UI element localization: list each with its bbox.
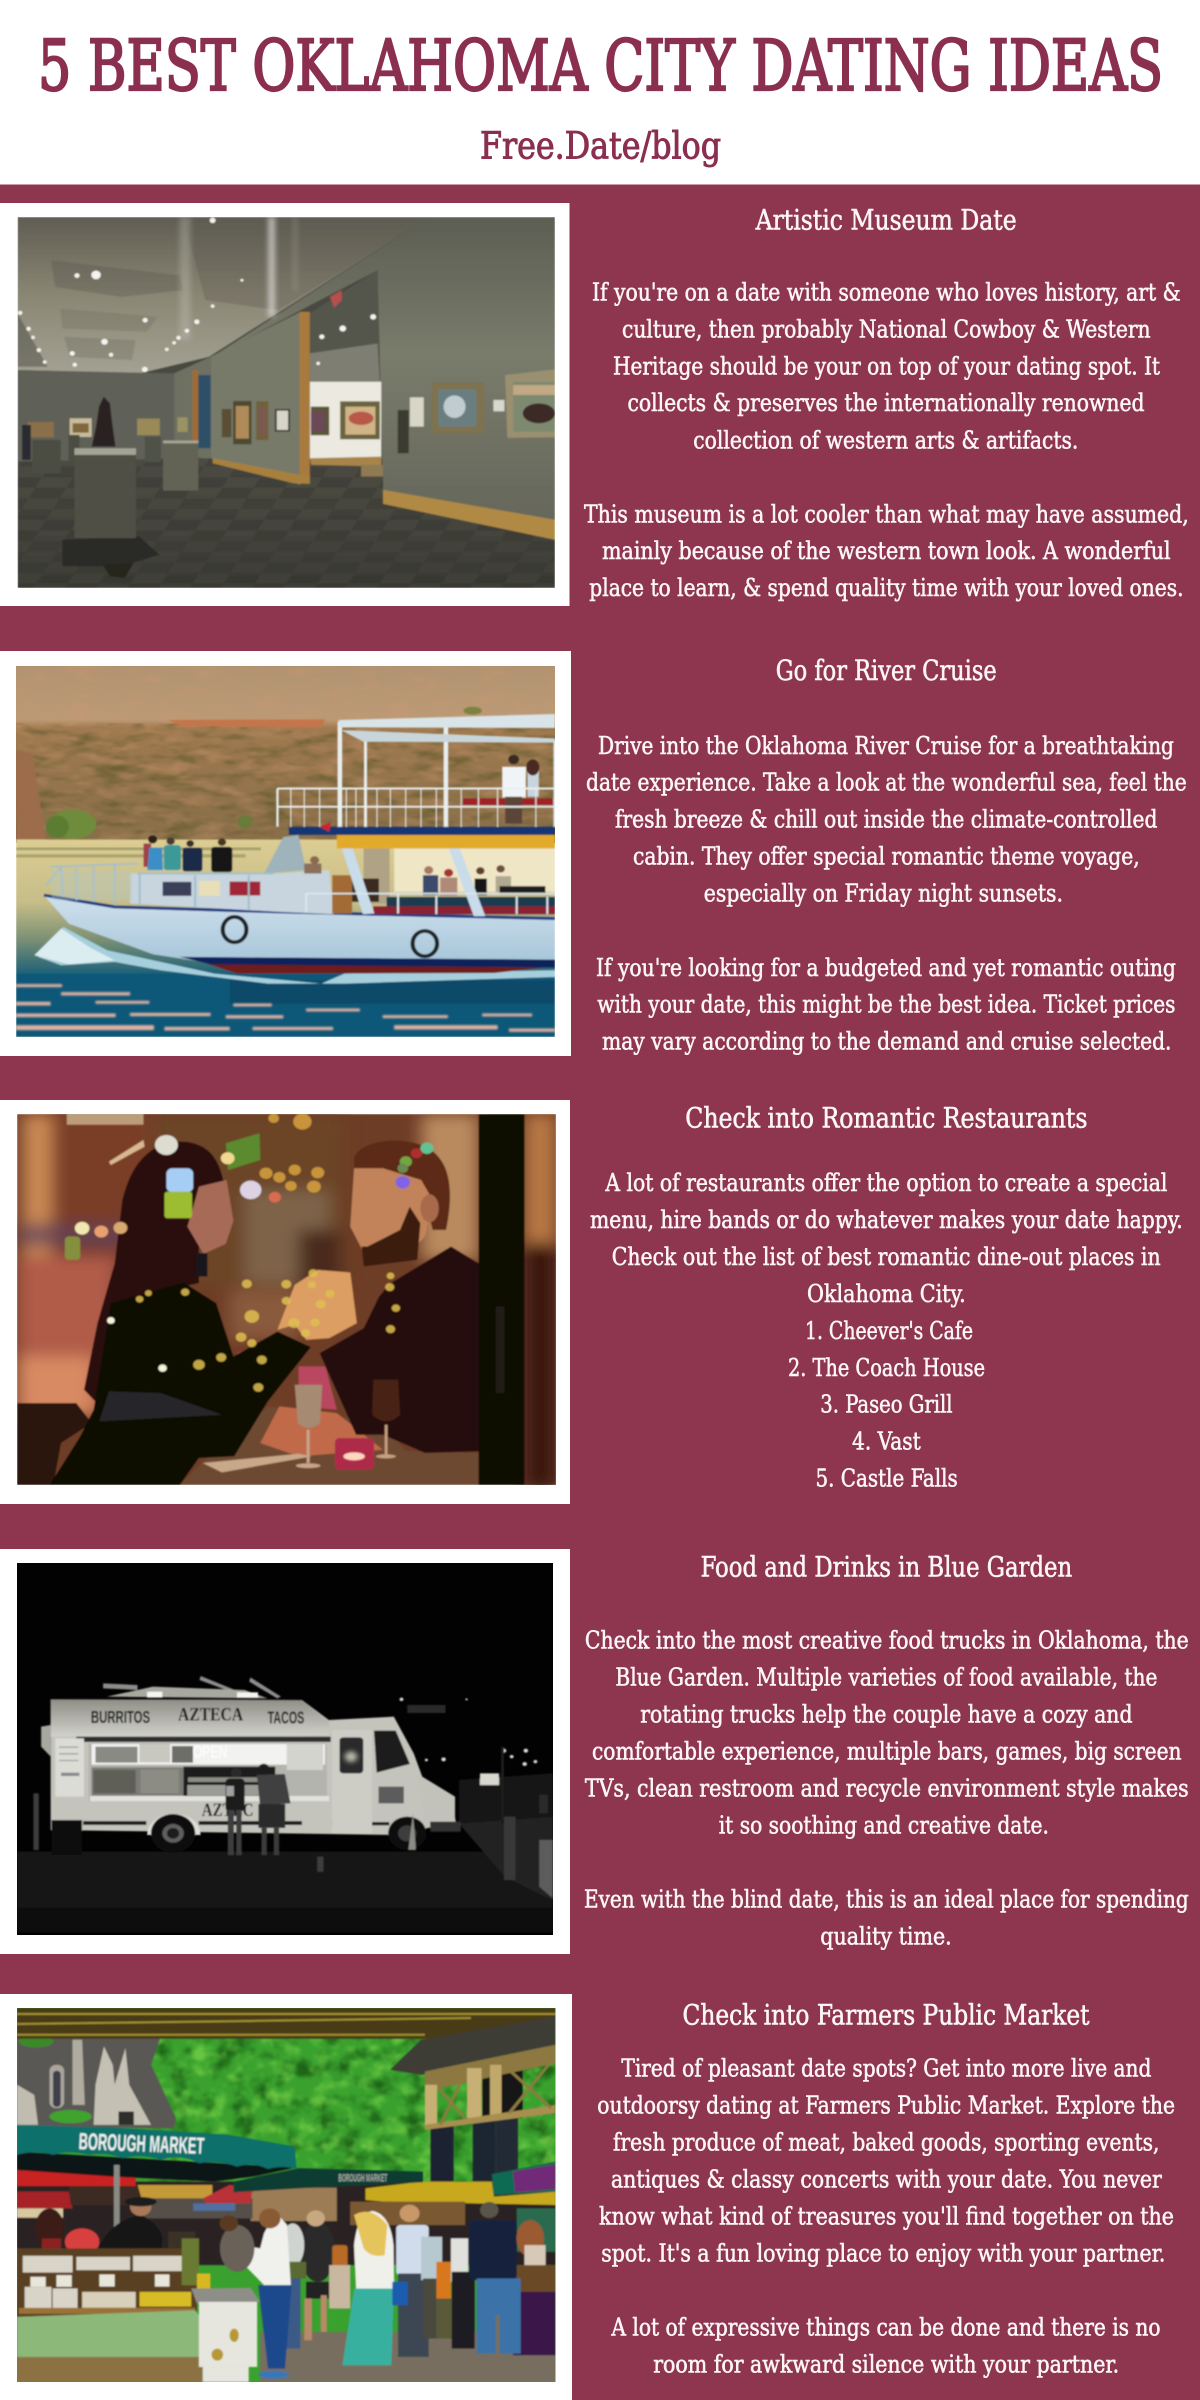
- stalls background: [17, 2182, 556, 2265]
- list: romantic restaurants: 3. Paseo Grill: [820, 1390, 952, 1419]
- text block: blind date: quality time.: [820, 1922, 952, 1951]
- shoppers: [220, 2202, 546, 2379]
- text block: drive into cruise: especially on Friday night sunsets.: [704, 879, 1063, 908]
- crowd background: [35, 2197, 195, 2265]
- customers: [226, 1764, 291, 1855]
- text block: museum look: [584, 499, 1189, 602]
- text block: outdoorsy dating: fresh produce of meat, baked goods, sporting events,: [613, 2128, 1159, 2157]
- photo: farmers market: [17, 2008, 556, 2382]
- panel: Check into Romantic Restaurants: [0, 1100, 1183, 1504]
- list: romantic restaurants: [788, 1316, 985, 1493]
- table: [17, 1403, 479, 1485]
- text block: food trucks: [585, 1626, 1189, 1840]
- list: romantic restaurants: 4. Vast: [852, 1427, 921, 1456]
- heading: Check into Romantic Restaurants: [685, 1101, 1088, 1134]
- paintings: [27, 369, 555, 453]
- truck: BURRITOS: [91, 1707, 150, 1727]
- photo: museum gallery: [18, 217, 555, 588]
- truck: AZTECA: [178, 1705, 243, 1725]
- wheels: [147, 1813, 426, 1853]
- text block: outdoorsy dating: antiques & classy concerts with your date. You never: [611, 2165, 1162, 2194]
- heading: Go for River Cruise: [776, 654, 997, 687]
- pedestals: [22, 397, 198, 578]
- wine glasses: [295, 1380, 400, 1468]
- text block: food trucks: it so soothing and creative date.: [719, 1811, 1049, 1840]
- text block: outdoorsy dating: [597, 2054, 1175, 2268]
- lower cabin: [306, 847, 555, 916]
- truck: TACOS: [268, 1708, 304, 1727]
- text block: museum look: mainly because of the western town look. A wonderful: [602, 536, 1171, 565]
- list: romantic restaurants: 2. The Coach House: [788, 1353, 985, 1382]
- upper deck: [277, 714, 555, 832]
- list: romantic restaurants: 1. Cheever's Cafe: [805, 1316, 973, 1345]
- photo frame: [0, 651, 571, 1056]
- text block: blind date: [584, 1885, 1189, 1951]
- photo: river cruise boat: [16, 666, 555, 1037]
- text block: expressive things: room for awkward silence with your partner.: [653, 2350, 1119, 2379]
- main awning: [17, 2125, 297, 2258]
- text block: restaurants: Check out the list of best romantic dine-out places in: [612, 1242, 1161, 1271]
- text block: drive into cruise: fresh breeze & chill out inside the climate-controlled: [615, 805, 1157, 834]
- truck: AZTEC: [202, 1798, 253, 1821]
- market roof: [17, 2008, 556, 2039]
- text block: expressive things: [610, 2313, 1161, 2379]
- text block: drive into cruise: [586, 731, 1187, 908]
- text block: outdoorsy dating: Tired of pleasant date spots? Get into more live and: [621, 2054, 1151, 2083]
- hands: [277, 1270, 357, 1340]
- text block: restaurants: [590, 1168, 1183, 1308]
- text block: restaurants: Oklahoma City.: [807, 1279, 966, 1308]
- panel: Artistic Museum Date: [0, 203, 1189, 606]
- photo: food truck at night: [17, 1563, 553, 1935]
- text block: expressive things: A lot of expressive things can be done and there is no: [610, 2313, 1161, 2342]
- truck: OPEN: [193, 1742, 227, 1761]
- service window: [89, 1743, 329, 1802]
- heading: Food and Drinks in Blue Garden: [701, 1551, 1072, 1584]
- photo frame: [0, 1549, 570, 1954]
- iron structure: [425, 2045, 556, 2232]
- bow passengers: [143, 835, 321, 874]
- text block: food trucks: Blue Garden. Multiple varieties of food available, the: [615, 1663, 1157, 1692]
- text block: intro: [592, 278, 1181, 454]
- beehive stand: [191, 2288, 260, 2382]
- photo: couple in restaurant: [17, 1114, 556, 1485]
- photo frame: [0, 1100, 570, 1504]
- subtitle: Free.Date/blog: [480, 124, 721, 167]
- truck: [41, 1676, 461, 1835]
- heading: Artistic Museum Date: [755, 203, 1017, 236]
- photo frame: [0, 1994, 572, 2400]
- text block: intro: Heritage should be your on top of your dating spot. It: [613, 351, 1160, 380]
- text block: intro: culture, then probably National Cowboy & Western: [622, 314, 1151, 343]
- text block: outdoorsy dating: spot. It's a fun loving place to enjoy with your partner.: [601, 2239, 1165, 2268]
- bow rail: [46, 864, 274, 910]
- bokeh lights: [65, 1114, 433, 1392]
- text block: outdoorsy dating: know what kind of treasures you'll find together on the: [599, 2202, 1174, 2231]
- man: [320, 1141, 479, 1453]
- text block: drive into cruise: cabin. They offer special romantic theme voyage,: [633, 842, 1140, 871]
- main awning: BOROUGH MARKET: [78, 2129, 205, 2160]
- street lights: [400, 1698, 537, 1785]
- text block: food trucks: rotating trucks help the couple have a cozy and: [640, 1700, 1132, 1729]
- list: romantic restaurants: 5. Castle Falls: [816, 1464, 958, 1493]
- church: [17, 2035, 176, 2128]
- text block: intro: collection of western arts & artifacts.: [693, 425, 1078, 454]
- heading: Check into Farmers Public Market: [682, 1998, 1090, 2031]
- text block: restaurants: A lot of restaurants offer the option to create a special: [604, 1168, 1167, 1197]
- photo: farmers market: BOROUGH MARKET: [338, 2171, 388, 2184]
- panel: Check into Farmers Public Market: [0, 1994, 1175, 2400]
- text block: budget: [596, 953, 1176, 1056]
- header: title band: [0, 0, 1200, 184]
- photo frame: [0, 203, 570, 606]
- candle: [335, 1438, 374, 1470]
- life rings: [223, 917, 437, 956]
- panel: Go for River Cruise: [0, 651, 1187, 1056]
- text block: intro: collects & preserves the internationally renowned: [628, 388, 1144, 417]
- woman: [50, 1142, 311, 1485]
- panel: Food and Drinks in Blue Garden: [0, 1549, 1189, 1954]
- produce stall: [17, 2238, 210, 2317]
